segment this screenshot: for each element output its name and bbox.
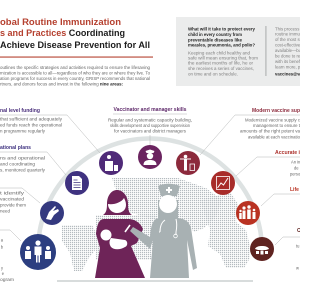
area: modern vaccine supply: Modern vaccine sup	[252, 108, 300, 114]
panel: question and process	[176, 17, 304, 86]
icon: community leaders	[250, 237, 274, 261]
area: community ownership	[296, 228, 301, 270]
nurse cap cross	[166, 187, 172, 193]
leader lines	[0, 114, 300, 245]
area: operational plans: ns and operational	[0, 156, 45, 160]
syringe	[125, 225, 130, 232]
area: community text: e	[2, 271, 5, 276]
panel process text	[275, 26, 304, 76]
baby	[100, 230, 127, 249]
area: vaccinator and manager skills: Vaccinator and manager skills	[114, 107, 187, 113]
panel question	[188, 26, 256, 48]
area: accurate information: de	[294, 166, 299, 170]
panel question: What will it take to protect every	[188, 26, 256, 32]
area: community text: y	[1, 266, 4, 270]
area: national level funding: that sufficient and adequately	[0, 116, 63, 122]
area: national level funding: n programme regularly	[0, 128, 46, 134]
area: identify unvaccinated: vaccinated	[0, 196, 25, 202]
area: operational plans: and coordinating	[0, 162, 36, 166]
panel process text: learn more, p	[275, 64, 300, 70]
area: modern vaccine supply: amounts of the right potent va	[240, 128, 300, 134]
panel answer: she receives a series of vaccines,	[188, 66, 254, 71]
nurse hair	[158, 200, 178, 220]
area: vaccinator and manager skills: skills development and supportive supervision	[110, 123, 191, 128]
area: community text: ogram	[0, 277, 15, 282]
panel answer: on time and on schedule.	[188, 72, 238, 76]
panel question: preventable diseases like	[188, 38, 243, 42]
area: community text: a	[1, 238, 4, 242]
arc connecting icons	[38, 138, 262, 252]
mother face	[108, 198, 126, 213]
area: identify unvaccinated: provide them	[0, 202, 27, 208]
area: vaccinator and manager skills	[108, 107, 192, 134]
illustration: mother and baby	[95, 190, 145, 278]
panel process text: This process	[275, 26, 299, 32]
panel answer: Keeping each child healthy and	[188, 50, 251, 56]
area: modern vaccine supply: management to ensure t	[253, 123, 300, 128]
area: modern vaccine supply	[240, 108, 301, 140]
area: vaccinator and manager skills: for vaccinators and district managers	[114, 128, 186, 134]
area: national level funding: ed funds reach the operational	[0, 122, 62, 128]
icon: community group	[20, 234, 56, 270]
area: operational plans: ational plans	[0, 145, 31, 151]
ground line	[57, 280, 253, 282]
area: national level funding	[0, 108, 63, 134]
intro text: outlines the specific strategies and activities required to ensure the lifesaving	[0, 65, 151, 70]
panel answer	[188, 50, 258, 76]
stethoscope	[159, 219, 177, 235]
area: identify unvaccinated: t identify	[0, 190, 25, 196]
nurse cap	[158, 184, 180, 196]
icon: family life course	[236, 201, 260, 225]
area: national level funding: nal level funding	[0, 108, 40, 114]
area: community text	[0, 238, 15, 282]
area: life course: Life	[290, 187, 299, 193]
area: community ownership: tu	[296, 244, 299, 248]
icon: vaccinator nurse	[138, 145, 162, 169]
intro text	[0, 65, 151, 86]
illustration: nurse	[130, 184, 197, 278]
area: modern vaccine supply: available at each vaccinatio	[248, 134, 300, 140]
title	[0, 16, 150, 50]
panel process text: cost-effective	[275, 42, 300, 48]
title: obal Routine Immunization	[0, 16, 121, 27]
icon: plans document	[65, 171, 89, 195]
intro text: ation programs for success in every country, GRISP recommends that national	[0, 76, 150, 81]
title rule	[0, 56, 153, 58]
area: operational plans	[0, 145, 46, 172]
nurse body	[130, 218, 197, 278]
nurse face	[159, 195, 177, 213]
area: identify unvaccinated: need	[0, 208, 11, 214]
panel question: child in every country from	[188, 32, 242, 37]
intro text: rtners, and donors focus and invest in the following nine areas:	[0, 82, 123, 86]
area: community ownership: w	[296, 266, 299, 270]
area: accurate information: perso	[290, 172, 300, 176]
title: s and Practices Coordinating	[0, 27, 125, 38]
mother hair	[103, 190, 132, 215]
panel question: measles, pneumonia, and polio?	[188, 42, 255, 48]
title: Achieve Disease Prevention for All	[0, 39, 150, 50]
icon: vaccine supply	[176, 151, 200, 175]
panel answer: the earliest months of life, he or	[188, 60, 254, 66]
area: accurate information	[275, 150, 301, 176]
area: vaccinator and manager skills: Regular and systematic capacity building,	[108, 118, 192, 122]
icon: funding circle	[99, 151, 123, 175]
area: community text: b	[1, 244, 4, 250]
icon: hand with vaccine	[40, 201, 64, 225]
area: identify unvaccinated	[0, 190, 27, 214]
area: operational plans: s, monitored quarterly	[0, 168, 46, 172]
icon: data chart	[211, 171, 235, 195]
intro text: mization is accessible to all—regardless of who they are or where they live. To	[0, 70, 151, 76]
area: modern vaccine supply: Modernized vaccine supply c	[245, 118, 300, 122]
mother body	[95, 219, 145, 278]
panel answer: safe will mean ensuring that, from	[188, 56, 258, 60]
world dot map	[62, 178, 250, 271]
area: accurate information: Accurate i	[275, 150, 300, 156]
